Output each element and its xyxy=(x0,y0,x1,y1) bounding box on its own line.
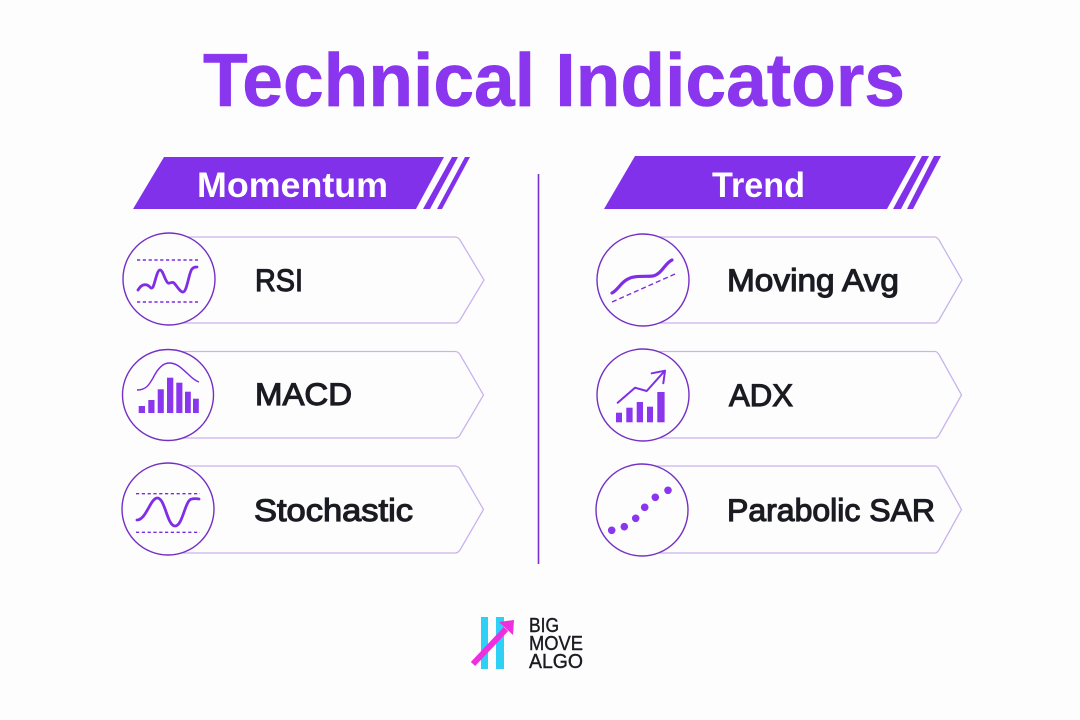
item: ADX xyxy=(597,349,962,441)
column divider xyxy=(538,174,540,564)
icon: ADX rising bars xyxy=(616,371,665,422)
item: Stochastic xyxy=(122,463,484,555)
logo: Big Move Algo: MOVE xyxy=(529,633,583,655)
logo: Big Move Algo xyxy=(473,615,583,673)
heading: momentum banner: Momentum xyxy=(197,166,388,205)
title: Technical Indicators xyxy=(203,38,905,122)
heading: momentum banner xyxy=(133,157,470,209)
item: MACD xyxy=(122,350,484,440)
logo: Big Move Algo: BIG xyxy=(529,615,559,637)
icon: RSI oscillator xyxy=(137,260,198,302)
icon: moving average lines xyxy=(612,260,675,302)
panel: trend xyxy=(596,156,962,556)
item: Moving Avg xyxy=(597,234,962,326)
item: Stochastic: Stochastic xyxy=(254,492,413,528)
panel: momentum xyxy=(122,157,484,555)
heading: trend banner: Trend xyxy=(712,166,805,205)
item: RSI xyxy=(123,233,484,325)
item: Parabolic SAR xyxy=(596,464,962,556)
item: Moving Avg: Moving Avg xyxy=(727,262,899,298)
icon: stochastic wave xyxy=(136,494,200,532)
icon: parabolic dots xyxy=(608,486,672,534)
item: MACD: MACD xyxy=(255,376,352,412)
item: RSI: RSI xyxy=(255,262,303,298)
item: Parabolic SAR: Parabolic SAR xyxy=(727,492,935,528)
icon: MACD histogram xyxy=(137,363,199,413)
logo: Big Move Algo: ALGO xyxy=(529,651,583,673)
heading: trend banner xyxy=(604,156,941,209)
item: ADX: ADX xyxy=(729,377,793,413)
